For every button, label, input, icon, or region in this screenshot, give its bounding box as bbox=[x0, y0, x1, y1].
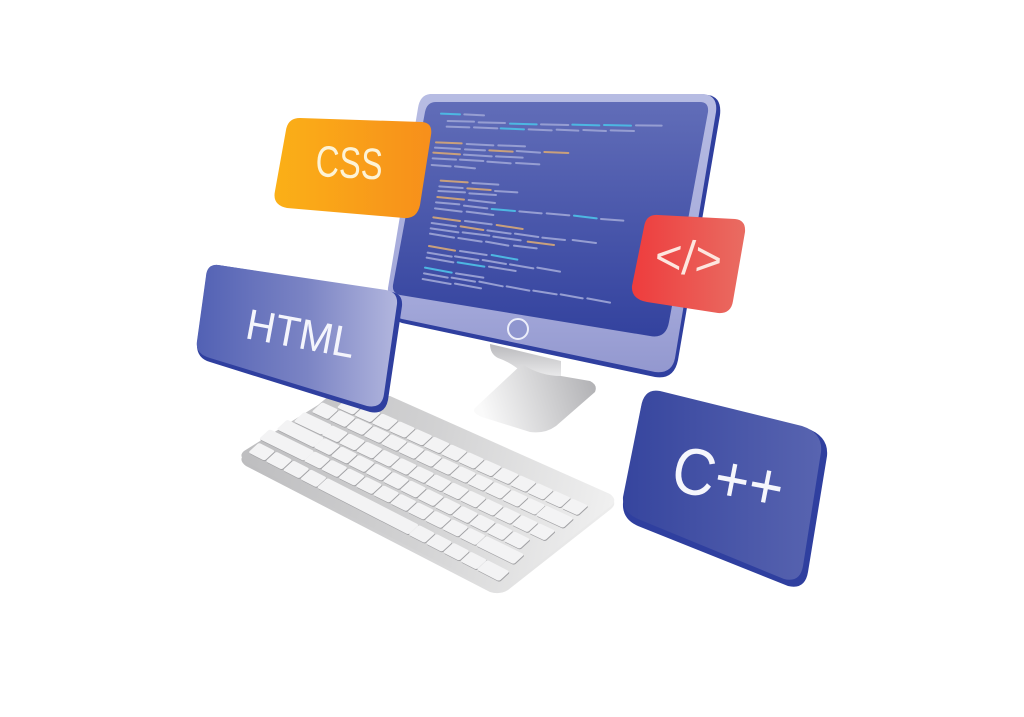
monitor back edge bbox=[392, 95, 720, 377]
CSS label: CSS bbox=[314, 137, 384, 189]
keyboard keys bbox=[250, 399, 587, 580]
code lines on screen bbox=[423, 114, 662, 303]
monitor stand bbox=[474, 344, 596, 432]
C++ label: C++ bbox=[666, 431, 790, 525]
HTML card face bbox=[197, 265, 397, 406]
monitor bezel bbox=[388, 94, 716, 372]
keyboard bbox=[241, 395, 614, 593]
C++ card edge bbox=[623, 392, 827, 587]
monitor bbox=[388, 94, 720, 377]
HTML label: HTML bbox=[242, 301, 359, 368]
C++ card face bbox=[623, 391, 821, 580]
monitor screen bbox=[393, 102, 708, 336]
card: CSS bbox=[274, 118, 431, 218]
card: C++ bbox=[623, 391, 827, 587]
monitor power button bbox=[508, 319, 528, 339]
code tag symbol: </> bbox=[653, 230, 724, 288]
card: code tag bbox=[632, 215, 745, 313]
card: HTML bbox=[197, 265, 402, 412]
HTML card edge bbox=[197, 265, 402, 412]
